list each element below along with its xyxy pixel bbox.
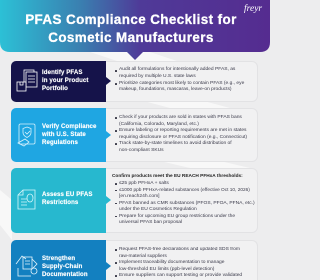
heading: Supply-Chain: [42, 263, 82, 270]
text: strengthen: Ensure suppliers can support testing or provide validated: [119, 273, 242, 278]
text: assess: under the EU Cosmetics Regulation: [119, 207, 197, 212]
text: verify: Check if your products are sold in states with PFAS bans: [119, 115, 242, 120]
text: verify: [115, 114, 247, 152]
icon: document shield: [18, 190, 36, 210]
text: verify: requiring disclosure or PFAS notification (e.g., Connecticut): [119, 134, 247, 140]
text: identify: [115, 66, 244, 92]
heading: in your Product: [42, 77, 89, 84]
heading: Regulations: [42, 139, 78, 146]
panel: assess: [11, 168, 258, 233]
text: strengthen: Implement traceability documentation to manage: [119, 260, 224, 265]
text: strengthen: Request PFAS-free declarations and updated SDS from: [119, 247, 240, 252]
heading: [42, 191, 93, 206]
text: strengthen: low-threshold EU limits (ppb-level detection): [119, 266, 214, 272]
panel: identify: [11, 61, 258, 102]
text: verify: non-compliant SKUs: [119, 148, 164, 152]
text: identify: required by multiple U.S. state laws: [119, 74, 196, 78]
panel: verify: [11, 108, 258, 162]
text: verify: Track state-by-state timelines to avoid distribution of: [119, 141, 232, 146]
text: verify: Ensure labeling or reporting requirements are met in states: [119, 128, 246, 133]
heading: [42, 69, 89, 92]
header banner: [0, 0, 270, 60]
heading: Portfolio: [42, 85, 68, 92]
text: assess: Confirm products meet the EU REACH PFHxA thresholds:: [112, 174, 243, 179]
icon: shield checklist: [17, 124, 36, 146]
text: strengthen: [115, 247, 242, 278]
title: [25, 12, 237, 44]
text: verify: (California, Colorado, Maryland, etc.): [119, 122, 199, 126]
text: strengthen: raw-material suppliers: [119, 254, 167, 258]
icon: supply documents: [16, 256, 38, 276]
heading: Strengthen: [42, 255, 75, 262]
text: identify: makeup, foundations, mascaras, leave-on products): [119, 87, 232, 92]
heading: Identify PFAS: [42, 69, 83, 76]
text: identify: Audit all formulations for intentionally added PFAS, as: [119, 67, 235, 72]
text: assess: ≤25 ppb PFHxA + salts: [119, 181, 169, 186]
text: assess: universal PFAS ban proposal: [119, 220, 182, 225]
title: Cosmetic Manufacturers: [48, 30, 214, 44]
heading: with U.S. State: [42, 131, 86, 138]
text: assess: ≤1000 ppb PFHxA-related substances (effective Oct 10, 2026): [119, 188, 250, 192]
heading: Documentation: [42, 271, 88, 278]
heading: Assess EU PFAS: [42, 191, 93, 198]
text: assess: PFAS banned as CMR substances (PFOS, PFOA, PFNA, etc.): [119, 200, 255, 206]
text: assess: Prepare for upcoming EU group restrictions under the: [119, 214, 235, 218]
heading: [42, 255, 88, 278]
text: identify: Prioritize categories most likely to contain PFAS (e.g., eye: [119, 80, 244, 86]
heading: Restrictions: [42, 199, 78, 206]
heading: [42, 123, 97, 146]
text: assess: [112, 174, 255, 225]
heading: Verify Compliance: [42, 123, 97, 130]
title: PFAS Compliance Checklist for: [25, 12, 237, 27]
text: assess: [en.reach24h.com]: [119, 194, 160, 199]
logo: freyr: [244, 4, 262, 14]
icon: documents: [16, 70, 38, 92]
panel: strengthen: [11, 240, 258, 280]
